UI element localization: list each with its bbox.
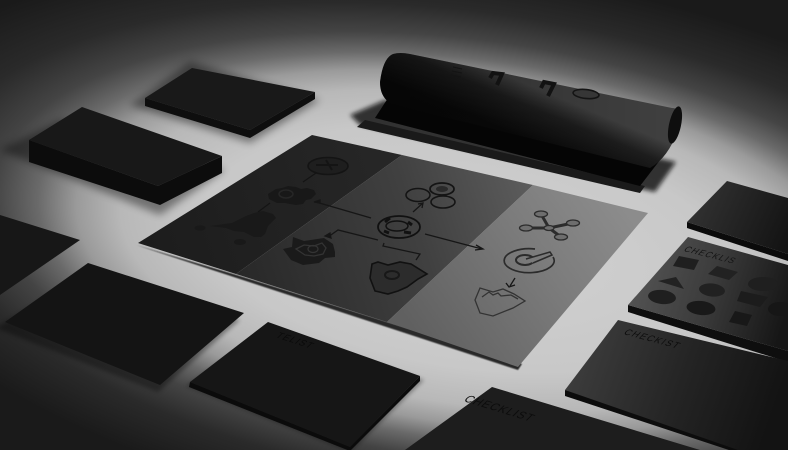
- sheet shadow: [136, 245, 522, 370]
- icon: gear medallion: [308, 158, 348, 174]
- card: left: [0, 263, 244, 392]
- board: top right: [687, 181, 788, 261]
- scroll icon marks: [451, 67, 599, 100]
- box: upper stack: [130, 62, 320, 143]
- icons panel 1: [194, 158, 348, 245]
- box: lower stack: [0, 107, 225, 215]
- icon: hub gear: [378, 216, 420, 238]
- panel 3: [387, 185, 648, 367]
- icon: cracked shield: [475, 288, 525, 316]
- flow arrows: [314, 200, 515, 287]
- label: CHECKLIS: [682, 245, 739, 265]
- panel 1: [138, 135, 402, 274]
- scroll end cap: [665, 105, 685, 145]
- sheet: lower checklist: [565, 320, 788, 450]
- icon: gear badge: [283, 237, 335, 265]
- icon: gear with arrow dial: [504, 249, 554, 273]
- icon: flower cog: [268, 186, 316, 205]
- connector lines: [258, 173, 316, 212]
- label: CHECKLIST: [461, 394, 538, 424]
- sheet: checklist shapes: [628, 237, 788, 362]
- main sheet: three-fold diagram: [136, 135, 648, 370]
- icon: network figure: [194, 211, 276, 245]
- scroll shadow: [350, 100, 676, 192]
- label: TELIST: [273, 331, 317, 351]
- scroll base sheet: [357, 120, 645, 193]
- scroll: rolled sheet: [350, 53, 685, 193]
- icon: shield gear: [370, 262, 427, 294]
- panel 2: [236, 155, 533, 322]
- label: CHECKIST: [621, 328, 684, 351]
- card: bottom with checklist heading: [405, 387, 700, 450]
- icon: three circles: [406, 183, 455, 208]
- shape cutouts: [647, 256, 788, 326]
- card: far left: [0, 215, 80, 295]
- card: bottom centre with text: [186, 322, 424, 450]
- scroll body: [380, 53, 680, 168]
- icon: molecule network: [520, 211, 580, 240]
